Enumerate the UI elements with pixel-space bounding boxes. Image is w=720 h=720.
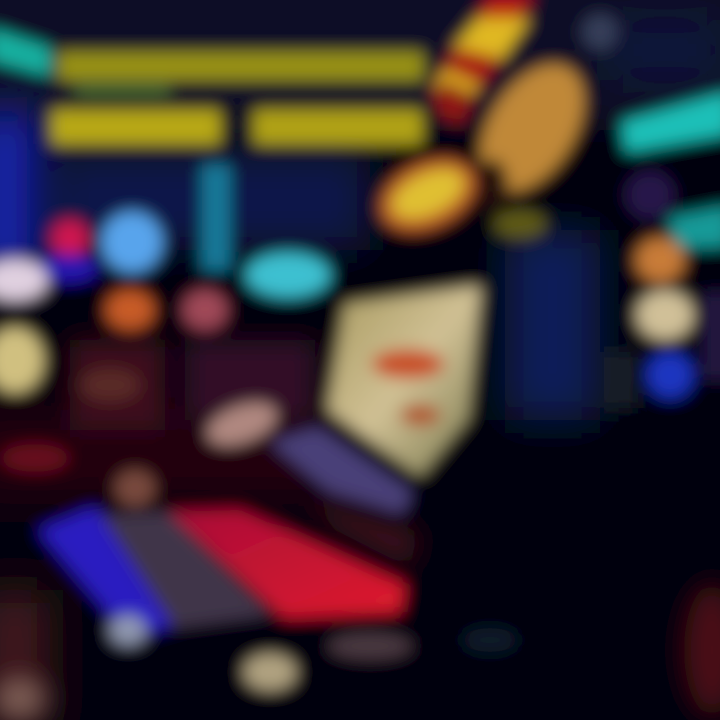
bottom table lights (0, 628, 518, 718)
player hand lower (115, 470, 155, 506)
slot machine (270, 286, 480, 568)
slot machine red symbols (372, 349, 444, 379)
table red felt (168, 510, 405, 618)
yellow and red blob (369, 145, 508, 245)
red and yellow rocket stripes (432, 0, 535, 124)
left side machine lights (0, 165, 330, 472)
title: blurred yellow heading (52, 52, 423, 144)
player hand (202, 395, 282, 453)
roulette table (38, 507, 405, 645)
orange blob (459, 46, 605, 238)
slot machine button deck (270, 428, 412, 514)
table chip highlight (110, 615, 146, 645)
table blue edge (38, 507, 172, 638)
right side lights (582, 14, 720, 408)
teal neon strip right (622, 92, 720, 152)
teal neon strip top left (0, 28, 50, 76)
teal neon strip lower right (668, 206, 720, 248)
table grey section (98, 512, 272, 628)
slot machine screen (328, 286, 480, 476)
